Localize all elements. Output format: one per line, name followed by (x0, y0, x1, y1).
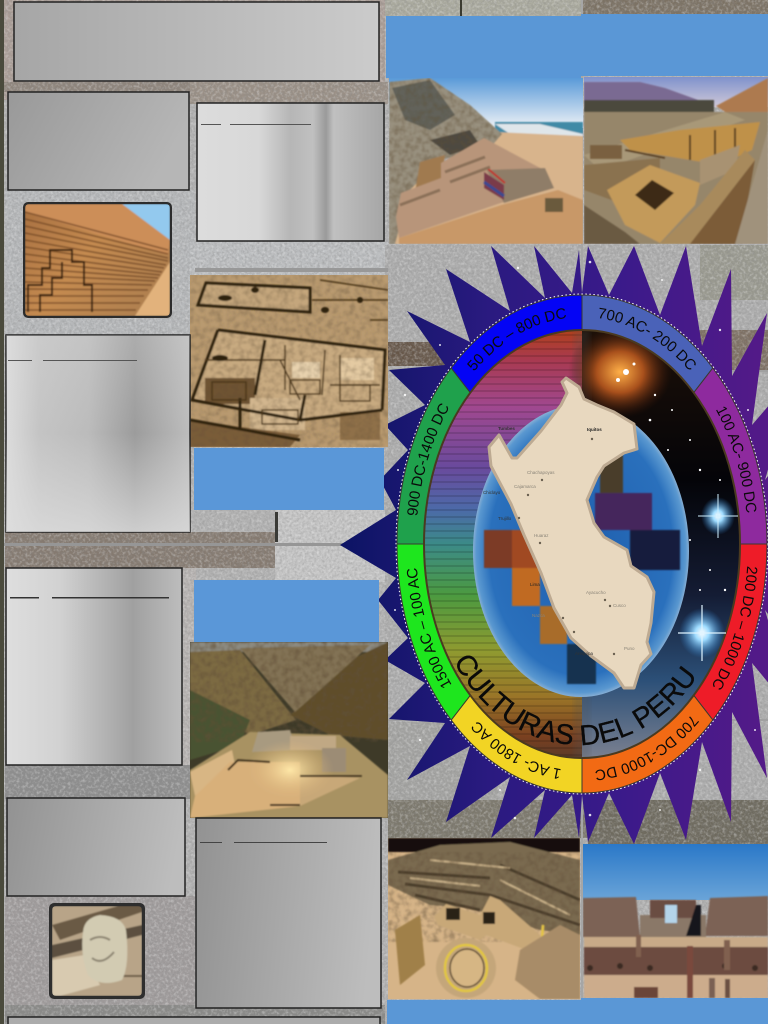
photo: Caral aerial (388, 838, 580, 999)
ring date labels: 1 AC- 1800 AC (472, 722, 561, 779)
map city labels: Arequipa (575, 651, 594, 656)
map city labels: Trujillo (498, 516, 512, 521)
panel: upper left (8, 92, 189, 190)
ring date labels: 700 AC- 200 DC (600, 308, 696, 370)
map city labels: Lima (530, 582, 540, 587)
map city labels: Huaraz (534, 533, 549, 538)
star flares (678, 494, 738, 661)
map city labels (483, 426, 635, 656)
panel: lower left with rule (6, 568, 182, 765)
map city labels: Iquitos (587, 427, 602, 432)
ring date labels: 200 DC – 1000 DC (713, 566, 758, 690)
purple star spikes (340, 246, 768, 844)
photo: adobe fort (584, 77, 768, 244)
photo: wall relief (23, 202, 172, 318)
ring date labels: 700 DC-1000 DC (595, 716, 699, 780)
photo: coastal pyramid (389, 78, 583, 244)
map city labels: Ayacucho (586, 590, 606, 595)
globe (473, 405, 689, 697)
blue label box: middle (194, 448, 384, 510)
panel: middle left with rule (6, 335, 190, 532)
panel: lower left plain (7, 798, 185, 896)
map city labels: Nazca (532, 613, 545, 618)
photo: Chavin model (190, 642, 388, 818)
title: Culturas del Peru: CULTURAS DEL PERU (457, 656, 694, 746)
map city labels: Puno (624, 646, 635, 651)
photo: Tiwanaku temple (583, 844, 768, 998)
map city labels: Chachapoyas (527, 470, 555, 475)
panel: bottom centre with rule (196, 818, 381, 1008)
blue label box: bottom middle (387, 1000, 581, 1024)
timeline ring segments (397, 295, 767, 793)
blue label box: top right (581, 14, 768, 76)
photo: stone head (49, 903, 145, 999)
star speckles (394, 261, 756, 819)
panel: upper centre with rule (197, 103, 384, 241)
chakana stepped cross (484, 455, 680, 684)
ring date labels: 1500 AC – 100 AC (406, 568, 452, 688)
ring date labels: 100 AC- 900 DC (716, 406, 756, 513)
blue label box: lower middle (194, 580, 379, 642)
photo: Chan Chan aerial (190, 275, 388, 447)
ring date labels (406, 308, 758, 780)
emblem: Culturas del Peru (340, 246, 768, 844)
panel: bottom strip (8, 1017, 380, 1024)
ring date labels: 900 DC-1400 DC (407, 404, 448, 516)
map city labels: Chiclayo (483, 490, 501, 495)
ring date labels: 50 DC – 800 DC (467, 308, 566, 370)
blue label box: bottom right (581, 998, 768, 1024)
panel: top banner (14, 2, 379, 81)
inner rainbow and space field (424, 326, 740, 758)
map of Peru (483, 378, 654, 688)
map city labels: Tumbes (498, 426, 515, 431)
map city labels: Cusco (613, 603, 626, 608)
blue label box: top middle (386, 16, 581, 78)
map city labels: Cajamarca (514, 484, 536, 489)
